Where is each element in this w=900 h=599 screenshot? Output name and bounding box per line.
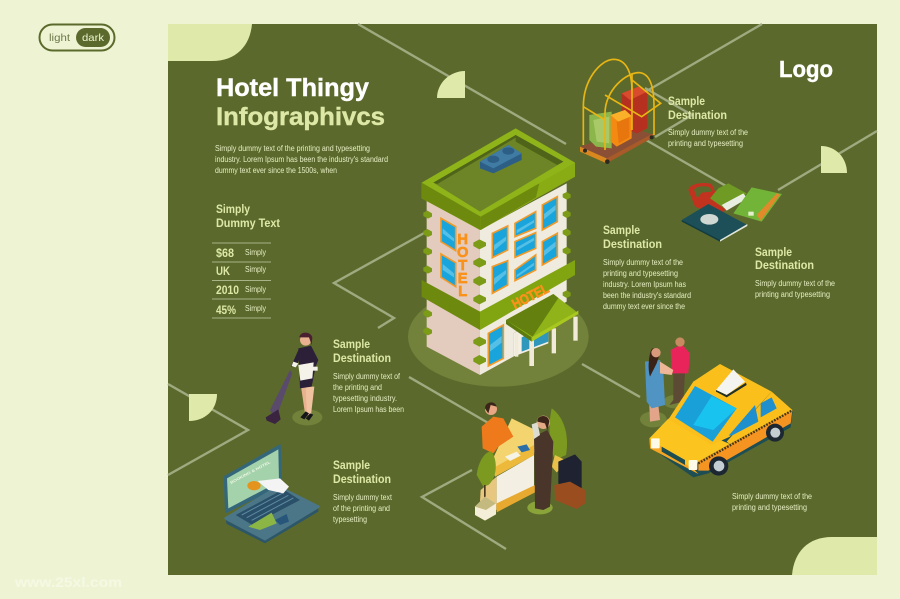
stats table: Simply: [245, 285, 266, 294]
pilasters: [423, 192, 571, 365]
text block: housekeeping destination: typesetting industry.: [333, 394, 397, 403]
awning: [506, 294, 578, 342]
windows: [441, 197, 557, 366]
quarter circle: right: [821, 146, 847, 173]
text block: housekeeping destination: [333, 339, 404, 414]
text block: booking destination: typesetting: [333, 515, 367, 524]
illustration: hotel building: [408, 128, 589, 387]
toggle: light and dark: light: [49, 32, 70, 44]
quarter circle: top centre: [437, 71, 465, 98]
vertical hotel sign: H: [457, 232, 468, 248]
title: Hotel Thingy: [216, 74, 369, 102]
columns: [515, 317, 578, 366]
watermark: www.25xl.com: [14, 574, 122, 590]
stats table: Simply: [245, 304, 266, 313]
stats table: Simply: [245, 248, 266, 257]
panel: dark green main panel: [168, 24, 877, 575]
band: [422, 280, 480, 330]
text block: housekeeping destination: Destination: [333, 353, 391, 365]
intro text: [215, 144, 388, 175]
text block: taxi caption: Simply dummy text of the: [732, 492, 812, 501]
illustration: yellow taxi: [649, 364, 793, 477]
quarter circle: lower left: [189, 394, 217, 421]
text block: passport destination: printing and typesetting: [755, 290, 830, 299]
text block: housekeeping destination: Lorem Ipsum has been: [333, 405, 404, 414]
text block: luggage cart destination: Simply dummy text of the: [668, 128, 748, 137]
text block: passport destination: Sample: [755, 247, 792, 259]
stats table: UK: [216, 266, 231, 278]
vertical hotel sign: [457, 232, 468, 300]
text block: luggage cart destination: Sample: [668, 96, 705, 108]
text block: booking destination: Sample: [333, 460, 370, 472]
text block: housekeeping destination: Sample: [333, 339, 370, 351]
vertical hotel sign: O: [457, 245, 468, 261]
text block: taxi caption: printing and typesetting: [732, 503, 807, 512]
decorative corner: bottom right: [792, 537, 877, 575]
text block: passport destination: Simply dummy text of the: [755, 279, 835, 288]
logo: Logo: [779, 56, 833, 82]
toggle: light and dark: dark: [82, 32, 105, 44]
text block: centre destination: Simply dummy text of the: [603, 258, 683, 267]
text block: taxi caption: [732, 492, 812, 512]
illustration: laptop booking: [224, 445, 318, 543]
text block: centre destination: [603, 225, 691, 311]
text block: booking destination: of the printing and: [333, 504, 390, 513]
stats table: Simply: [245, 265, 266, 274]
stats table: Simply: [216, 204, 251, 216]
illustration: guest and bellhop: [640, 337, 690, 427]
illustration: maid with vacuum: [266, 333, 322, 425]
intro text: industry. Lorem Ipsum has been the industry's standard: [215, 155, 388, 164]
stats table: $68: [216, 248, 235, 260]
vertical hotel sign: E: [458, 271, 468, 287]
text block: booking destination: [333, 460, 393, 524]
rooftop units: [480, 145, 522, 173]
illustration: laptop booking: BOOKING & HOTEL: [230, 460, 272, 485]
text block: housekeeping destination: Simply dummy text of: [333, 372, 401, 381]
front hotel sign: HOTEL: [509, 280, 552, 312]
illustration: passport and cards: [682, 183, 782, 242]
intro text: Simply dummy text of the printing and typesetting: [215, 144, 370, 153]
title: Infographivcs: [216, 103, 385, 131]
vertical hotel sign: T: [458, 258, 467, 274]
stats table: Dummy Text: [216, 218, 280, 230]
stats table: 45%: [216, 305, 236, 317]
text block: centre destination: been the industry's standard: [603, 291, 691, 300]
text block: centre destination: Destination: [603, 239, 662, 251]
stats table: 2010: [216, 285, 239, 297]
text block: booking destination: Simply dummy text: [333, 493, 393, 502]
decorative corner: top left: [168, 24, 252, 61]
text block: centre destination: dummy text ever since the: [603, 302, 685, 311]
entrance: [513, 315, 548, 357]
vertical hotel sign: L: [458, 284, 467, 300]
illustration: luggage cart: [580, 59, 661, 164]
text block: passport destination: Destination: [755, 260, 814, 272]
title: [216, 74, 385, 131]
text block: centre destination: Sample: [603, 225, 640, 237]
stats table: [212, 204, 280, 318]
text block: housekeeping destination: the printing and: [333, 383, 382, 392]
text block: luggage cart destination: printing and typesetting: [668, 139, 743, 148]
text block: centre destination: industry. Lorem Ipsum has: [603, 280, 686, 289]
illustration: reception desk: [475, 402, 585, 521]
roof: [422, 128, 575, 230]
text block: passport destination: [755, 247, 835, 299]
toggle: light and dark: [40, 24, 114, 50]
text block: booking destination: Destination: [333, 474, 391, 486]
text block: luggage cart destination: [668, 96, 748, 148]
intro text: dummy text ever since the 1500s, when: [215, 166, 337, 175]
text block: luggage cart destination: Destination: [668, 110, 727, 122]
text block: centre destination: printing and typesetting: [603, 269, 678, 278]
